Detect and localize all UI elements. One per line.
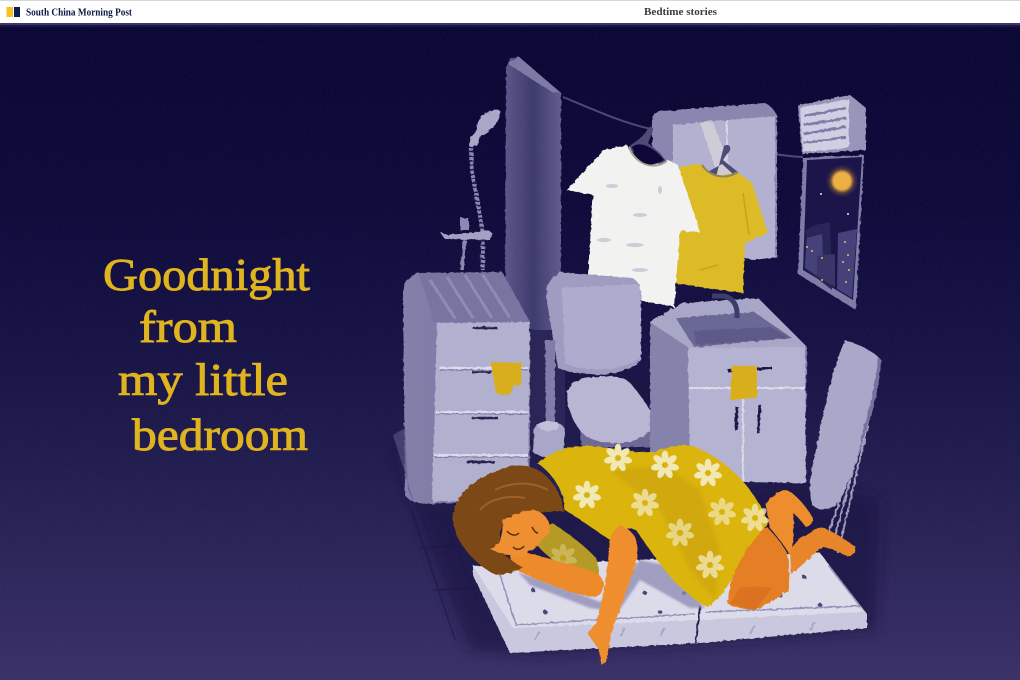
far leg and foot	[790, 527, 856, 574]
partition wall	[505, 56, 561, 330]
headline	[103, 250, 311, 460]
headline: bedroom	[132, 410, 308, 460]
thigh	[728, 527, 789, 610]
arm under head	[510, 553, 604, 597]
window with night view	[798, 155, 864, 310]
cast shadow	[518, 560, 705, 612]
mirror cabinet	[652, 103, 777, 260]
pillow	[537, 523, 599, 578]
raised knee	[766, 490, 813, 555]
tray beside drawers	[393, 428, 415, 505]
sink cabinet	[650, 298, 807, 483]
floor shadow and tiles	[392, 440, 880, 655]
shower	[440, 110, 500, 270]
floor mattress	[473, 553, 867, 653]
header title: Bedtime stories	[644, 7, 717, 18]
headline: my little	[118, 355, 288, 405]
hanging arm and hand	[588, 525, 638, 665]
headline: Goodnight	[103, 250, 311, 300]
yellow t-shirt on hanger	[672, 145, 768, 293]
toilet brush	[533, 340, 565, 457]
bedroom illustration	[392, 56, 881, 665]
toilet	[546, 272, 655, 447]
hair	[453, 465, 564, 575]
city buildings	[804, 193, 857, 298]
sink tap	[712, 296, 737, 318]
dark recess behind toilet	[530, 330, 565, 440]
moon	[829, 168, 855, 194]
publisher logo: South China Morning Post	[26, 8, 133, 18]
headline: from	[139, 302, 237, 352]
face	[490, 510, 550, 557]
drawer towel	[491, 362, 522, 395]
header bar	[0, 0, 1020, 27]
dress flowers	[548, 444, 770, 579]
chest of drawers	[403, 272, 530, 504]
sink towel	[730, 366, 757, 400]
wall vent	[798, 95, 866, 154]
clothesline	[563, 97, 803, 157]
folded ironing board	[810, 340, 881, 553]
dress	[537, 445, 767, 607]
sleeping woman	[453, 444, 856, 665]
white t-shirt on hanger	[566, 127, 700, 307]
